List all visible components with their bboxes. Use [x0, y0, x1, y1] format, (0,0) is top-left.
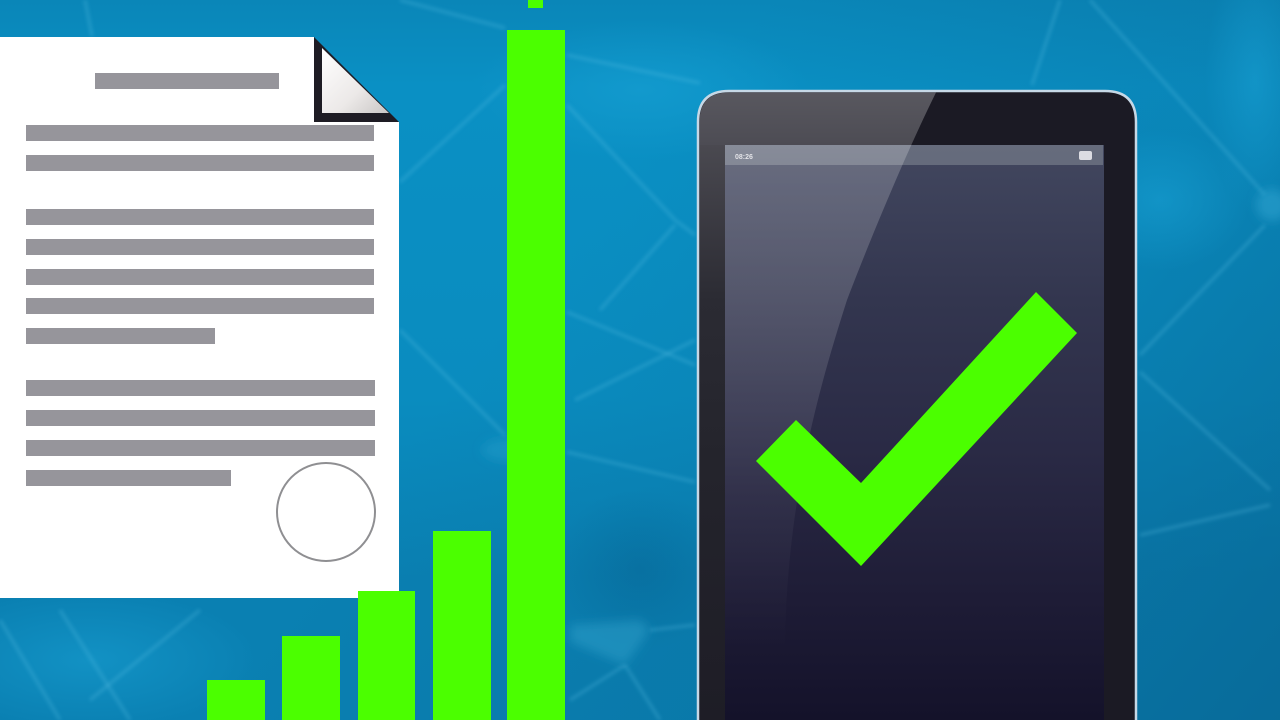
status bar	[725, 145, 1103, 165]
tablet body	[698, 91, 1136, 720]
status bar icon	[1079, 151, 1092, 160]
status bar clock: 08:26	[735, 154, 753, 161]
bar 1	[207, 680, 265, 720]
tablet screen	[725, 145, 1104, 720]
document title line	[95, 73, 279, 89]
document	[0, 37, 399, 598]
bar 2	[282, 636, 340, 720]
document folded corner	[314, 37, 399, 122]
left bezel	[700, 145, 725, 720]
paragraph three	[26, 380, 375, 486]
bar top fragment	[528, 0, 543, 8]
paragraph one	[26, 125, 374, 171]
icon: green check mark	[756, 292, 1077, 566]
seal circle	[277, 463, 375, 561]
bar 5	[507, 30, 565, 720]
paragraph two	[26, 209, 374, 344]
glass reflection	[700, 92, 936, 650]
bar 4	[433, 531, 491, 720]
tablet	[698, 91, 1136, 720]
bar chart	[207, 0, 565, 720]
document sheet	[0, 37, 399, 598]
bar 3	[358, 591, 415, 720]
